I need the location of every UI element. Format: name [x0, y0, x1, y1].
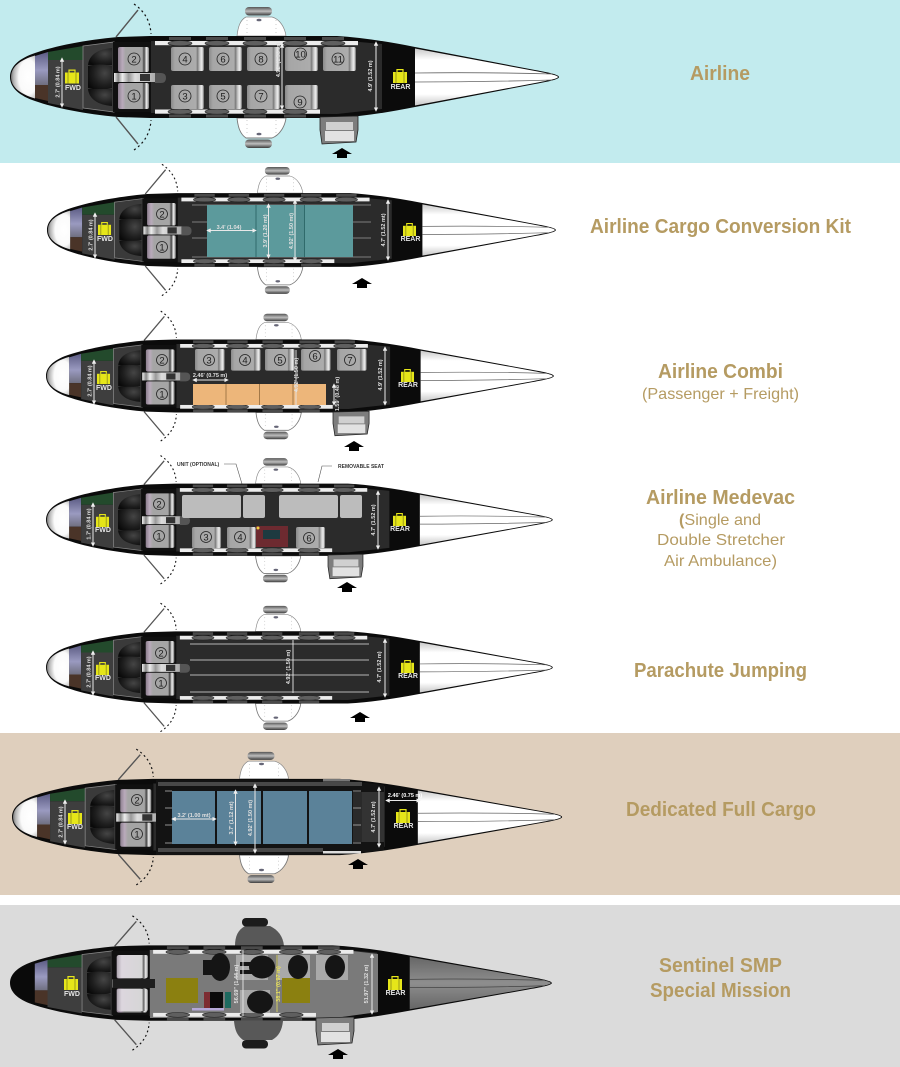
seat numbers: 1	[158, 678, 164, 690]
cargo dimensions: 3.2' (1.00 mt)	[177, 813, 211, 819]
cabin width dimension	[371, 790, 379, 844]
cabin width dimension: 4.7' (1.52 m)	[371, 504, 377, 536]
forward baggage: FWD	[96, 385, 112, 392]
arrow: entry	[337, 582, 357, 592]
title: airline medevac: Airline Medevac	[646, 487, 795, 509]
seat numbers: 7	[258, 92, 264, 102]
seat numbers	[132, 794, 142, 840]
callout labels	[177, 462, 384, 527]
seat numbers: 5	[220, 92, 226, 102]
seat numbers: 2	[159, 356, 165, 366]
seat numbers: 2	[134, 796, 140, 806]
background band: sentinel special mission	[0, 905, 900, 1067]
rear baggage	[398, 370, 418, 389]
cabin width dimension: 4.9' (1.52 m)	[378, 359, 384, 391]
seat numbers: 2	[158, 648, 164, 660]
mission dimensions: 56.69" (1.44 m)	[234, 964, 240, 1003]
arrow: entry	[344, 441, 364, 451]
rear baggage	[394, 810, 413, 830]
title: sentinel smp special mission: Sentinel SMP	[659, 955, 782, 977]
callout labels: REMOVABLE SEAT	[338, 464, 384, 470]
cabin width dimension: 4.7' (1.52 mt)	[381, 213, 387, 247]
title: airline combi	[642, 361, 799, 403]
cabin width dimension: 4.7' (1.52 m)	[371, 801, 377, 833]
seat numbers: 1	[156, 532, 162, 542]
combi dimensions: 4.92' (1.50 m)	[294, 358, 300, 392]
forward baggage	[88, 363, 112, 401]
cabin rails	[192, 205, 371, 257]
seat numbers: 10	[295, 50, 306, 60]
seat numbers: 3	[203, 532, 209, 544]
seat numbers: 6	[220, 54, 226, 66]
window bands	[153, 946, 353, 1020]
mission dimensions: 38.1" (0.97 m)	[276, 966, 282, 1002]
forward baggage	[86, 506, 111, 543]
aircraft: parachute jumping	[46, 603, 553, 732]
cabin width dimensions: 4.7' (1.52 m)	[377, 651, 383, 683]
forward baggage	[88, 216, 113, 255]
medical unit	[256, 526, 288, 547]
rear baggage: REAR	[390, 526, 410, 533]
seat numbers	[156, 208, 168, 254]
seat numbers: 9	[297, 98, 303, 108]
cabin width dimension	[364, 957, 372, 1011]
flight crew seats	[113, 955, 155, 1011]
airstairs door	[328, 554, 363, 579]
rear baggage	[386, 977, 405, 997]
forward baggage	[64, 977, 80, 998]
seat numbers: 1	[159, 242, 165, 254]
rear baggage	[391, 70, 410, 91]
seat numbers: 6	[312, 352, 318, 362]
cabin width dimension	[381, 203, 388, 257]
seat numbers: 4	[182, 54, 188, 66]
cargo dimensions: 3.7' (1.12 mt)	[229, 801, 235, 835]
rear baggage	[401, 224, 420, 243]
forward baggage: 2.7' (0.84 m)	[88, 365, 94, 397]
cabin width dimensions	[276, 43, 376, 108]
forward baggage: FWD	[97, 236, 113, 243]
mission console	[192, 992, 231, 1010]
cabin width dimension	[371, 494, 378, 546]
aircraft: airline cargo conversion kit	[47, 164, 556, 296]
cargo hold floor	[156, 779, 384, 855]
seat numbers: 2	[156, 500, 162, 510]
cargo dimensions	[175, 787, 422, 850]
title: parachute jumping: Parachute Jumping	[634, 660, 807, 682]
rear baggage: REAR	[394, 823, 413, 830]
title: airline: Airline	[690, 63, 750, 85]
seat numbers	[128, 48, 344, 108]
title: airline medevac: Air Ambulance)	[664, 553, 777, 570]
passenger seats	[195, 349, 367, 371]
forward baggage: 2.7' (0.84 m)	[88, 219, 94, 251]
rear baggage: REAR	[398, 673, 418, 680]
cabin width dimensions: 4.92' (1.50 m)	[286, 650, 292, 684]
seat numbers: 4	[237, 532, 243, 544]
arrow: entry	[348, 859, 368, 869]
operators	[203, 953, 345, 1014]
operator seats	[236, 955, 348, 1013]
freight area	[193, 384, 326, 405]
mission cargo pallets	[166, 978, 310, 1003]
forward baggage: FWD	[95, 675, 111, 682]
stretchers	[182, 495, 362, 518]
seat numbers: 1	[134, 830, 140, 840]
seat numbers: 1	[131, 92, 137, 102]
aircraft: dedicated full cargo	[12, 749, 562, 885]
seat numbers: 7	[347, 356, 353, 366]
static lines	[190, 644, 369, 692]
forward baggage	[86, 654, 111, 692]
background band: dedicated full cargo	[0, 733, 900, 895]
rear baggage: REAR	[401, 236, 420, 243]
aircraft: sentinel smp special mission	[10, 916, 552, 1059]
forward baggage: FWD	[65, 85, 81, 92]
cabin width dimension	[378, 350, 385, 402]
cargo dimensions: 3.9' (1.20 mt)	[263, 214, 269, 248]
callout labels: UNIT (OPTIONAL)	[177, 462, 220, 468]
passenger seats	[171, 47, 356, 109]
cargo dimensions: 4.92' (1.50 mt)	[248, 800, 254, 836]
forward baggage: FWD	[95, 527, 111, 534]
combi dimensions	[193, 350, 341, 411]
combi dimensions: 2.46' (0.75 m)	[193, 373, 227, 379]
seat numbers	[156, 350, 356, 400]
aircraft: airline layout	[10, 4, 559, 158]
rear baggage: REAR	[391, 84, 410, 91]
airstairs door	[320, 116, 358, 144]
arrow: entry	[352, 278, 372, 288]
arrow: entry	[332, 148, 352, 158]
teal cargo area	[207, 205, 353, 257]
passenger seats	[192, 527, 325, 548]
aircraft: airline combi	[46, 311, 554, 451]
forward baggage: FWD	[67, 824, 83, 831]
title: airline medevac: Double Stretcher	[657, 532, 786, 549]
cabin width dimensions	[286, 640, 385, 694]
title: dedicated full cargo: Dedicated Full Cargo	[626, 799, 816, 821]
seat numbers: 4	[242, 356, 248, 366]
seat numbers: 8	[258, 54, 264, 66]
aircraft: airline medevac	[46, 456, 553, 592]
seat numbers: 11	[333, 54, 343, 66]
forward baggage: 2.7' (0.84 m)	[58, 806, 64, 838]
cargo dimensions: 4.92' (1.50 mt)	[289, 213, 295, 249]
title: airline medevac: (Single and	[679, 512, 761, 529]
rear baggage: REAR	[386, 990, 405, 997]
title: airline combi: (Passenger + Freight)	[642, 386, 799, 403]
cargo dimensions: 3.4' (1.04)	[217, 225, 242, 231]
seat numbers: 3	[206, 356, 212, 366]
mission dimensions	[234, 950, 282, 1016]
arrow: entry	[350, 712, 370, 722]
cargo dimensions	[210, 203, 295, 258]
arrow: entry	[328, 1049, 348, 1059]
combi dimensions: 1.59' (0.48 m)	[335, 377, 341, 411]
rear baggage: REAR	[398, 382, 418, 389]
seat numbers: 3	[182, 92, 188, 102]
mission cabin floor	[150, 949, 378, 1018]
forward baggage: FWD	[64, 991, 80, 998]
seat numbers: 5	[277, 356, 283, 366]
seat numbers	[154, 498, 314, 544]
forward baggage: 2.7' (0.84 m)	[56, 66, 62, 98]
airstairs door	[333, 411, 369, 436]
background band: airline	[0, 0, 900, 163]
dark landing gear	[234, 918, 284, 1048]
rear baggage	[390, 514, 410, 533]
title: airline cargo conversion kit: Airline Cargo Conversion Kit	[590, 216, 851, 238]
forward baggage: 2.7' (0.84 m)	[86, 656, 92, 688]
blue cargo panels	[172, 791, 352, 844]
title: sentinel smp special mission	[650, 955, 791, 1002]
title: airline medevac	[646, 487, 795, 570]
forward baggage	[58, 803, 83, 841]
forward baggage	[56, 61, 81, 104]
seat numbers: 6	[306, 534, 312, 544]
seat numbers: 1	[159, 390, 165, 400]
forward baggage: 1.7' (0.84 m)	[86, 508, 92, 540]
cabin width dimension: 51.97" (1.32 m)	[364, 964, 370, 1003]
airstairs door	[316, 1017, 354, 1045]
seat numbers: 2	[159, 210, 165, 220]
title: airline combi: Airline Combi	[658, 361, 783, 383]
cabin width dimensions: 4.92' (1.50 m)	[276, 43, 282, 77]
cabin width dimensions: 4.9' (1.52 m)	[368, 60, 374, 92]
rear baggage	[398, 661, 418, 680]
seat numbers	[156, 648, 166, 690]
seat numbers: 2	[131, 54, 137, 66]
cargo dimensions: 2.46' (0.75 m)	[388, 793, 422, 799]
title: sentinel smp special mission: Special Mission	[650, 980, 791, 1002]
